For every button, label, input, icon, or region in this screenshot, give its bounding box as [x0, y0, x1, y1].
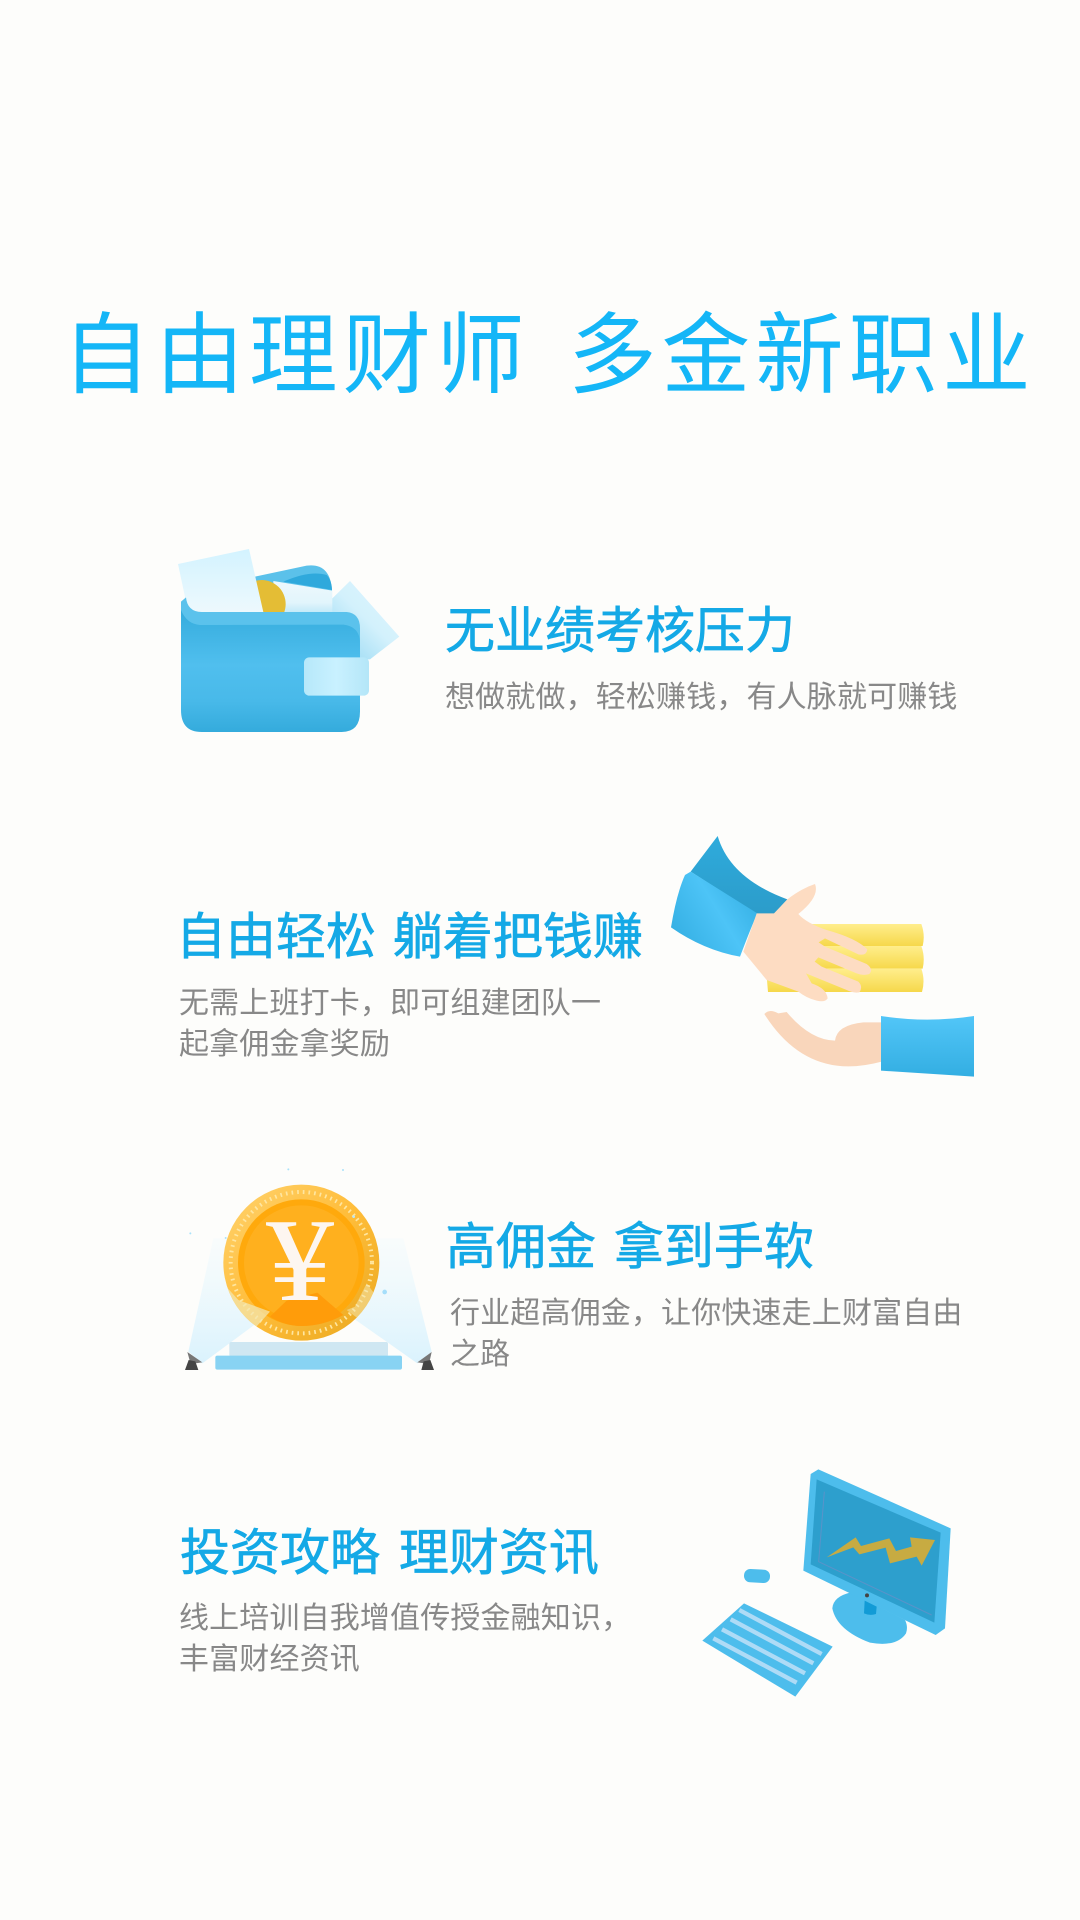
- text: row 2 description: 起拿佣金拿奖励: [179, 1028, 390, 1060]
- text: row 3 description: 之路: [450, 1338, 510, 1370]
- icon: wallet: [178, 549, 400, 732]
- heading: free and easy: 自由轻松 躺着把钱赚: [176, 909, 643, 965]
- heading: no performance pressure: 无业绩考核压力: [445, 603, 795, 659]
- text: row 1 description: 想做就做，轻松赚钱，有人脉就可赚钱: [445, 681, 958, 714]
- heading: high commission: 高佣金 拿到手软: [446, 1219, 814, 1275]
- text: row 2 description: [179, 987, 601, 1060]
- text: row 4 description: 线上培训自我增值传授金融知识，: [179, 1602, 631, 1635]
- text: row 4 description: [179, 1602, 631, 1676]
- text: row 3 description: [450, 1297, 963, 1370]
- icon: hands passing money: [671, 836, 974, 1077]
- icon: computer with rising chart: [702, 1469, 951, 1697]
- icon: gold coin on stage: [185, 1168, 450, 1370]
- icon: gold coin on stage: ¥: [266, 1194, 334, 1326]
- heading: investment strategy: 投资攻略 理财资讯: [180, 1525, 599, 1581]
- title: 自由理财师 多金新职业: [62, 306, 1036, 405]
- text: row 3 description: 行业超高佣金，让你快速走上财富自由: [450, 1297, 963, 1330]
- text: row 4 description: 丰富财经资讯: [179, 1642, 360, 1676]
- text: row 2 description: 无需上班打卡，即可组建团队一: [179, 987, 601, 1020]
